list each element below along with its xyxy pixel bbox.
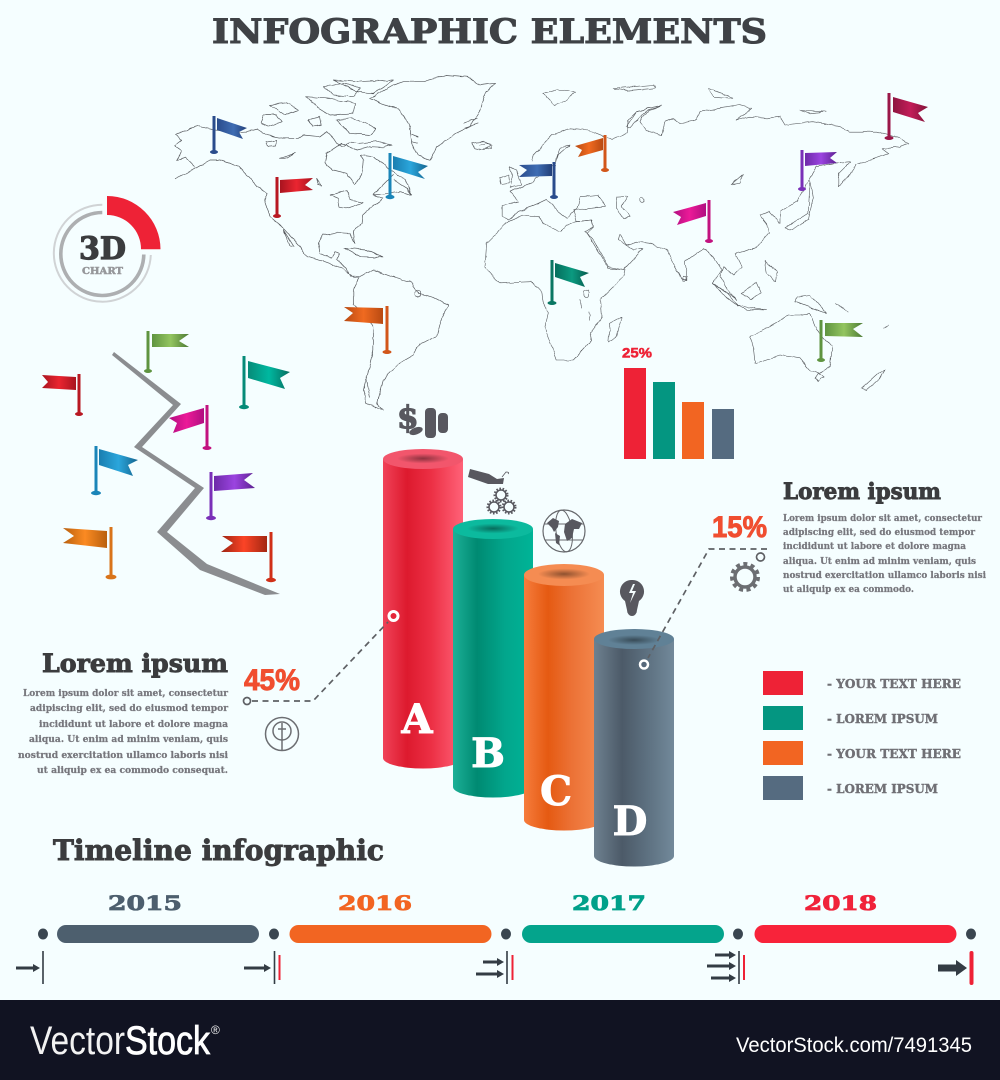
flag: red left xyxy=(42,374,83,416)
legend: - YOUR TEXT HERE xyxy=(827,747,961,761)
3D cylinder D: D xyxy=(613,798,647,845)
3D cylinder B: B xyxy=(471,730,505,777)
title: INFOGRAPHIC ELEMENTS xyxy=(212,12,767,52)
legend: - LOREM IPSUM xyxy=(827,712,938,726)
right leader line xyxy=(648,549,767,658)
marker ring on red cylinder xyxy=(389,612,398,620)
icon: globe xyxy=(543,509,585,553)
world map outline xyxy=(175,75,908,410)
marker ring on grey cylinder xyxy=(640,660,648,668)
footer logo: Vector xyxy=(30,1019,125,1063)
icon: oil bottle and gears xyxy=(468,469,516,514)
timeline segment 2016 xyxy=(290,891,492,943)
left body text: Lorem ipsum dolor sit amet, consectetur xyxy=(23,688,229,699)
3D cylinder B xyxy=(453,519,533,798)
flag: magenta left xyxy=(169,405,212,450)
timeline segment 2018 xyxy=(754,891,956,943)
legend: - YOUR TEXT HERE xyxy=(827,677,961,691)
right body text xyxy=(783,513,986,595)
callout: left 45% xyxy=(18,622,388,776)
icon: 3D chart badge: CHART xyxy=(82,266,123,277)
right heading: Lorem ipsum xyxy=(783,479,941,505)
footer logo: Stock xyxy=(125,1019,211,1063)
timeline segment 2015: 2015 xyxy=(108,891,182,915)
flag: purple East Asia xyxy=(798,150,837,191)
flag: green Australia xyxy=(817,320,863,362)
timeline arrows xyxy=(16,951,967,982)
flag: magenta Asia xyxy=(673,200,713,243)
footer logo: ® xyxy=(211,1023,220,1037)
3D cylinder A xyxy=(383,449,463,768)
bar chart xyxy=(622,346,734,459)
left body text: ut aliquip ex ea commodo consequat. xyxy=(37,765,228,776)
left body text: nostrud exercitation ullamco laboris nisi xyxy=(18,750,228,761)
callout: right 15% xyxy=(648,479,986,658)
timeline segment 2016: 2016 xyxy=(338,891,412,915)
icon: 3D chart badge: 3D xyxy=(79,231,126,267)
flag: red-orange left xyxy=(221,532,276,582)
flag: dark teal Africa xyxy=(548,260,589,305)
3D cylinder C: C xyxy=(540,768,572,815)
timeline segment 2017 xyxy=(522,891,724,943)
icon: dollar and coins xyxy=(397,400,448,438)
timeline dots xyxy=(38,928,976,940)
flag: teal left xyxy=(239,356,290,409)
timeline segment 2017: 2017 xyxy=(572,891,646,915)
flag: orange South America xyxy=(344,306,392,354)
legend xyxy=(763,671,961,800)
right body text: ut aliquip ex ea commodo. xyxy=(783,584,914,595)
flag: orange Scandinavia xyxy=(575,135,609,172)
flag: dark blue Alaska xyxy=(210,116,247,154)
3D cylinder D xyxy=(594,629,674,866)
footer logo xyxy=(30,1019,220,1063)
icon: gear xyxy=(732,564,758,590)
flag: red North America xyxy=(273,177,313,218)
flag: purple left xyxy=(206,472,255,520)
flag: dark blue Europe xyxy=(519,162,558,199)
left body text: aliqua. Ut enim ad minim veniam, quis xyxy=(29,734,228,745)
left percentage: 45% xyxy=(244,664,300,697)
right body text: adipiscing elit, sed do eiusmod tempor xyxy=(783,527,976,538)
timeline ticks xyxy=(43,951,974,985)
flag: blue left xyxy=(91,446,138,495)
3D cylinder C xyxy=(524,564,604,830)
left leader line xyxy=(244,622,388,704)
icon: 3D chart badge xyxy=(54,196,160,302)
timeline xyxy=(16,891,976,985)
timeline segment 2015 xyxy=(57,891,259,943)
icon: dollar and coins: $ xyxy=(397,400,419,436)
road line xyxy=(112,352,280,595)
flag: amber left xyxy=(63,527,116,579)
timeline heading: Timeline infographic xyxy=(53,834,384,867)
flag: maroon Siberia xyxy=(884,93,928,140)
left heading: Lorem ipsum xyxy=(42,649,228,678)
icon: tree in circle xyxy=(266,718,298,750)
left body text: incididunt ut labore et dolore magna xyxy=(39,719,228,730)
flag: green left xyxy=(144,331,189,373)
right body text: incididunt ut labore et dolore magna xyxy=(783,541,966,552)
right body text: nostrud exercitation ullamco laboris nisi xyxy=(783,570,986,581)
right body text: aliqua. Ut enim ad minim veniam, quis xyxy=(783,556,976,567)
footer url: VectorStock.com/7491345 xyxy=(736,1034,972,1057)
legend: - LOREM IPSUM xyxy=(827,782,938,796)
footer bar xyxy=(0,1000,1000,1080)
3D cylinder A: A xyxy=(400,696,433,743)
left body text xyxy=(18,688,229,776)
icon: light bulb xyxy=(620,580,644,616)
left body text: adipiscing elit, sed do eiusmod tempor xyxy=(30,703,229,714)
flag: light blue Canada xyxy=(386,153,428,199)
right body text: Lorem ipsum dolor sit amet, consectetur xyxy=(783,513,983,524)
bar chart value: 25% xyxy=(622,346,652,360)
timeline segment 2018: 2018 xyxy=(804,891,877,915)
right percentage: 15% xyxy=(712,511,767,544)
